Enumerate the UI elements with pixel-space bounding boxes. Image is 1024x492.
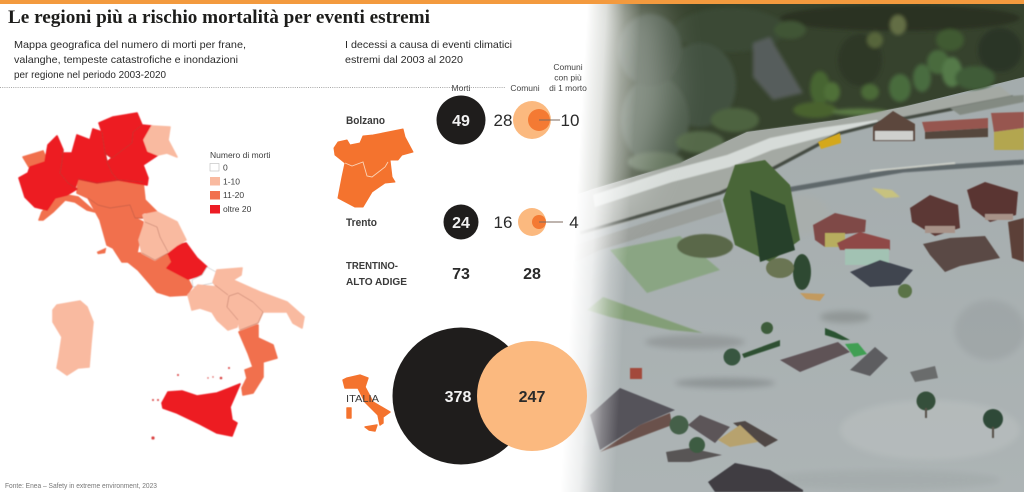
- map subtitle: valanghe, tempeste catastrofiche e inondazioni: [14, 54, 238, 66]
- chalet cluster: [813, 182, 1024, 287]
- map of Italy by region: [19, 113, 304, 440]
- region: Abruzzo: [167, 243, 207, 279]
- region: Puglia: [213, 268, 304, 328]
- river, wall and roads: [575, 86, 1024, 262]
- region: Calabria: [239, 325, 277, 395]
- region: Veneto: [107, 125, 158, 185]
- photo: landslide damage in an alpine valley: [555, 0, 1024, 492]
- legend item: oltre 20: oltre 20: [223, 204, 252, 214]
- region: Lombardia: [60, 129, 118, 188]
- lower-left buildings: [590, 368, 803, 492]
- top-row buildings: [818, 111, 1024, 150]
- icon: small map of Italy: [343, 375, 390, 431]
- forested mountainside: [560, 0, 1024, 200]
- region: Molise: [192, 267, 216, 287]
- region: Sardegna: [53, 301, 93, 375]
- map subtitle: Mappa geografica del numero di morti per frane,: [14, 39, 246, 51]
- region: Marche: [143, 212, 186, 252]
- region: Emilia-Romagna: [77, 179, 157, 218]
- map legend: [210, 150, 271, 214]
- region: Sicilia: [162, 384, 240, 436]
- row: Trentino-Alto Adige: TRENTINO-: [346, 260, 398, 272]
- row: Bolzano: Bolzano: [346, 115, 385, 127]
- chart subtitle: estremi dal 2003 al 2020: [345, 54, 463, 66]
- region: Elba: [97, 248, 106, 254]
- row: Bolzano: [346, 96, 579, 144]
- nested circles: [518, 208, 563, 236]
- municipalities with more than one death 4: 4: [569, 213, 579, 232]
- source note: Fonte: Enea – Safety in extreme environment, 2023: [5, 481, 157, 490]
- legend title: Numero di morti: [210, 150, 271, 160]
- deaths circle 49: [436, 96, 486, 144]
- column headers: Morti: [452, 83, 471, 93]
- green fields: [587, 234, 733, 333]
- deaths circle 49: 49: [452, 113, 470, 130]
- legend item: 1-10: 1-10: [223, 176, 240, 186]
- region: Toscana: [88, 198, 143, 262]
- region: Trentino-Alto Adige: [99, 113, 142, 158]
- central buried buildings: [742, 293, 938, 382]
- row: Trento: [346, 204, 579, 240]
- row: Trento: Trento: [346, 217, 377, 229]
- column headers: Comuni: [553, 62, 583, 72]
- column headers: [452, 62, 587, 93]
- region: Basilicata: [227, 293, 263, 330]
- trees: [670, 160, 1003, 453]
- houses and trees: [590, 111, 1024, 492]
- nested circles: [513, 101, 560, 139]
- column headers: con più: [554, 72, 582, 82]
- legend item: 0: 0: [223, 162, 228, 172]
- map subtitle: per regione nel periodo 2003-2020: [14, 69, 166, 81]
- region: Valle d'Aosta: [23, 151, 47, 167]
- top orange rule: [0, 0, 1024, 4]
- regional boundaries: [60, 125, 263, 330]
- column headers: di 1 morto: [549, 83, 587, 93]
- column headers: Comuni: [510, 83, 540, 93]
- small islands: [151, 367, 230, 440]
- map subtitle: [14, 39, 246, 81]
- municipalities circle 247: 247: [519, 389, 545, 406]
- region: Piemonte: [19, 136, 77, 210]
- label: ITALIA: [346, 394, 379, 405]
- row: Trentino-Alto Adige: [346, 260, 541, 288]
- deaths circle 24: [444, 204, 478, 240]
- region: Umbria: [139, 222, 168, 260]
- title: Le regioni più a rischio mortalità per eventi estremi: [8, 7, 430, 28]
- deaths circle 24: 24: [452, 215, 470, 232]
- region: Liguria: [39, 195, 95, 220]
- municipalities 16: 16: [494, 213, 512, 232]
- icon: Trentino-Alto Adige map: [334, 129, 413, 207]
- row: Trentino-Alto Adige: 73: [452, 266, 470, 283]
- region: Lazio: [128, 253, 192, 296]
- municipalities circle 247: [477, 341, 587, 451]
- debris texture: [645, 195, 1024, 490]
- row: Trentino-Alto Adige: 28: [523, 266, 541, 283]
- left white fade: [555, 0, 670, 492]
- row: Trentino-Alto Adige: ALTO ADIGE: [346, 276, 407, 288]
- municipalities 28: 28: [494, 111, 512, 130]
- region: Campania: [188, 285, 238, 330]
- row: Italia: [343, 328, 587, 464]
- legend item: 11-20: 11-20: [223, 190, 244, 200]
- deaths circle 378: 378: [445, 389, 471, 406]
- region: Friuli-Venezia Giulia: [144, 126, 177, 157]
- chart subtitle: [345, 39, 512, 66]
- deaths circle 378: [392, 328, 530, 464]
- chart subtitle: I decessi a causa di eventi climatici: [345, 39, 512, 51]
- municipalities with more than one death 10: 10: [561, 111, 579, 130]
